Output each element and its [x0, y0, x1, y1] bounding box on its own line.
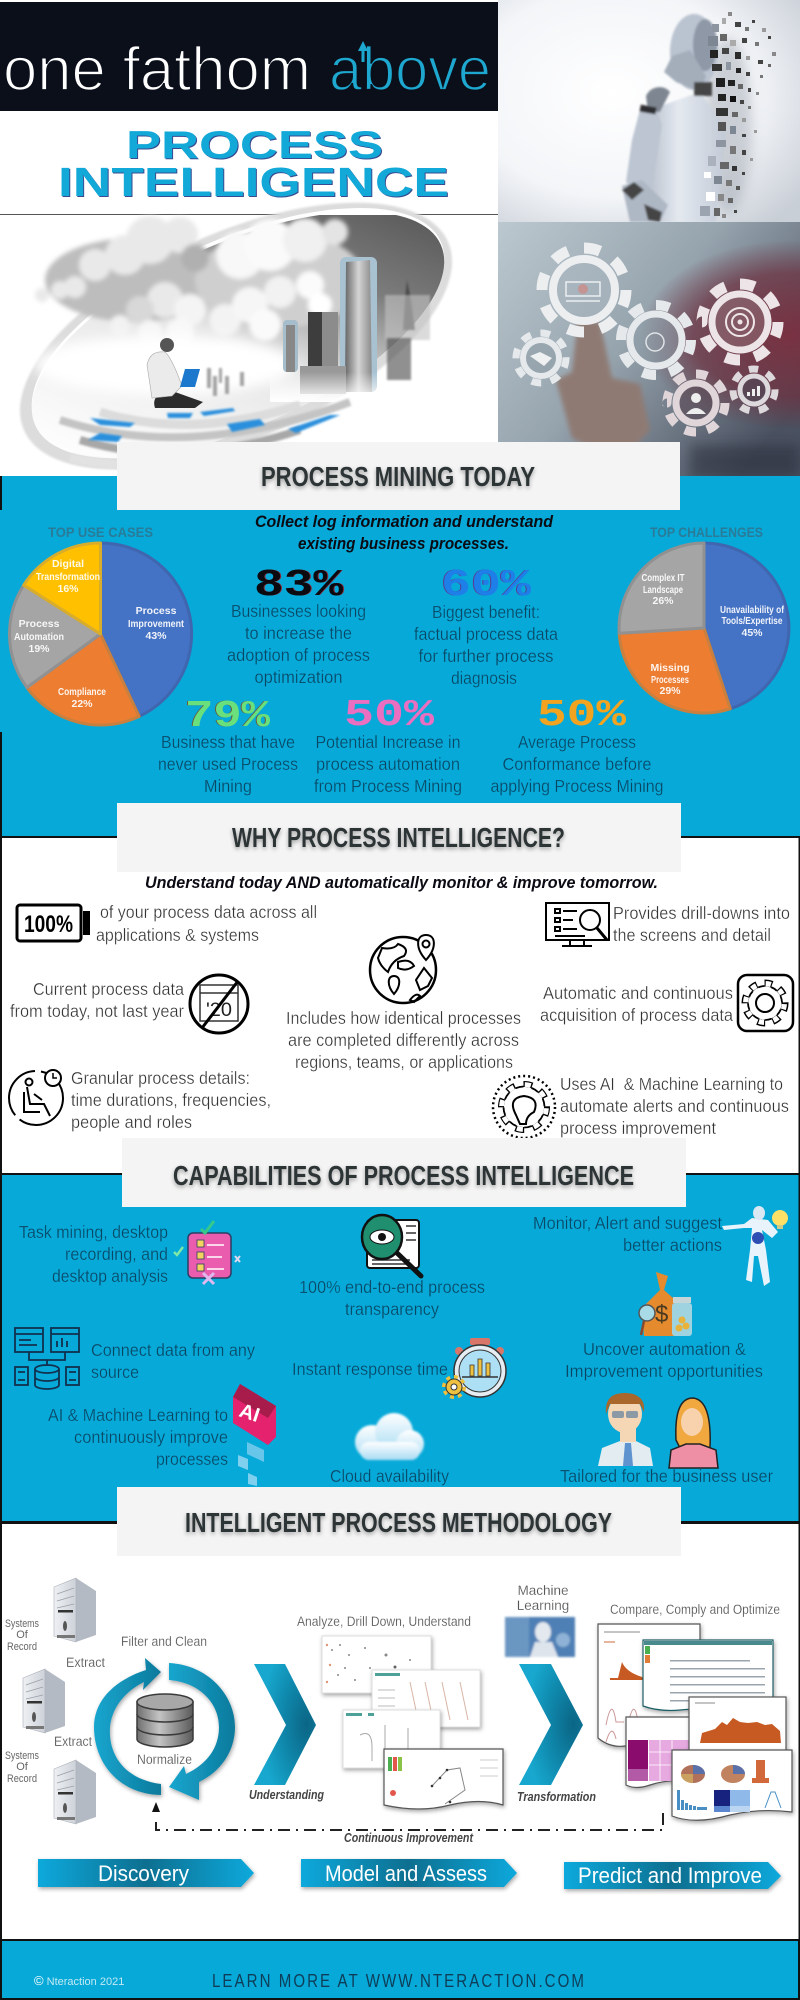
heading bar: process mining today: PROCESS MINING TODAY [261, 461, 535, 492]
tagline: Collect log information and understand [255, 513, 554, 531]
text: cloud availability: Cloud availability [330, 1466, 449, 1486]
chart: top challenges pie: 45% [741, 627, 763, 639]
screenshots: model views [297, 1614, 503, 1809]
sky and clouds [32, 215, 444, 458]
icon: battery 100%: 100% [24, 911, 73, 938]
heading bar: intelligent process methodology: INTELLIGENT PROCESS METHODOLOGY [185, 1507, 612, 1538]
icon: calendar 2020 crossed: '20 [206, 1000, 232, 1021]
concentric floor bands [60, 402, 350, 465]
chart: top use cases pie: Transformation [36, 571, 100, 583]
text: connect data: source [91, 1362, 139, 1382]
chevron: understanding [249, 1664, 324, 1802]
image: robot thinking [498, 0, 800, 222]
text: task mining: recording, and [65, 1244, 168, 1264]
text: automatic acquisition: Automatic and continuous [543, 983, 733, 1003]
text: ai and machine learning: automate alerts and continuous [560, 1096, 789, 1116]
stat: 50% automation: 50% [344, 694, 434, 737]
label: systems of record bottom: Of [16, 1761, 29, 1773]
icon: globe with pins [370, 935, 436, 1003]
text: drill-downs: Provides drill-downs into [613, 903, 790, 923]
image: robot on blue [505, 1617, 575, 1657]
screenshot: process flow [343, 1710, 440, 1768]
icon: magnifier over document [362, 1215, 421, 1276]
icon: monitor with magnifier [546, 903, 609, 946]
text: task mining: desktop analysis [52, 1266, 168, 1286]
chart: top use cases pie: Improvement [128, 618, 184, 630]
chart: top challenges pie: Complex IT [642, 572, 685, 584]
blue floor tiles [88, 408, 340, 442]
city skyline [283, 257, 430, 394]
label: systems of record bottom: Systems [5, 1750, 39, 1762]
text: instant response: Instant response time [292, 1359, 448, 1379]
stat: 79%: Business that have [161, 732, 295, 752]
screenshot: treemap [626, 1717, 700, 1788]
text: granular details: people and roles [71, 1112, 192, 1132]
chart: top use cases pie: Process [136, 605, 177, 617]
screenshot: scatter [322, 1636, 431, 1693]
stat: 50% conformance: Conformance before [502, 754, 652, 774]
screenshot: activity timeline [598, 1624, 700, 1746]
text: uncover automation: Uncover automation & [583, 1339, 746, 1359]
image: gears and pointing hand [498, 222, 800, 478]
chart: top challenges pie: 29% [659, 685, 681, 697]
label: systems of record top: Systems [5, 1618, 39, 1630]
text: monitor alert suggest: better actions [623, 1235, 722, 1255]
chart: top use cases pie: 22% [71, 698, 93, 710]
chart: top use cases pie: Digital [52, 558, 84, 570]
man [598, 1393, 653, 1466]
stat: 50% conformance: 50% [537, 694, 626, 737]
stat: 50% automation: Potential Increase in [316, 732, 460, 752]
icon: brain in gear with dotted ring [493, 1076, 555, 1138]
icon: stopwatch with gear [444, 1338, 506, 1397]
chevron: transformation: Transformation [517, 1790, 596, 1804]
small crowd of people [207, 368, 244, 396]
text: automatic acquisition: acquisition of process data [540, 1005, 733, 1025]
icon: server bottom [54, 1760, 96, 1824]
stat: 60%: factual process data [414, 624, 558, 644]
database cylinder [137, 1694, 193, 1747]
arrow: continuous improvement loop [152, 1802, 663, 1845]
gear: dollar [542, 248, 626, 332]
icon: seated person with clock [9, 1070, 63, 1125]
icon: calendar 2020 crossed [190, 975, 248, 1033]
text: end-to-end transparency: 100% end-to-end process [299, 1277, 485, 1297]
section: process mining today [0, 476, 800, 838]
stat: 83% [227, 564, 370, 687]
section: why process intelligence [0, 838, 800, 1176]
text: ai machine learning: continuously improve [74, 1427, 228, 1447]
icon: gear in rounded box [738, 975, 793, 1031]
screenshot: dashboard [384, 1749, 503, 1809]
stat: 83%: Businesses looking [231, 601, 366, 621]
text: tailored: Tailored for the business user [560, 1466, 773, 1486]
chart: top challenges pie [619, 524, 789, 713]
screenshot: pies and bars [672, 1750, 792, 1820]
stat: 79%: never used Process [158, 754, 298, 774]
stat: 50% automation: from Process Mining [314, 776, 462, 796]
label: analyze: Analyze, Drill Down, Understand [297, 1614, 471, 1629]
title: process intelligence: PROCESS [126, 124, 383, 167]
gear: person [667, 374, 725, 432]
text: identical processes: are completed differently across [288, 1030, 519, 1050]
label: machine learning: Machine [517, 1583, 569, 1598]
chart: top use cases pie [10, 524, 192, 725]
chart: top challenges pie: TOP CHALLENGES [650, 524, 763, 540]
stat: 83%: optimization [254, 667, 342, 687]
icon: connected data sources [15, 1328, 79, 1389]
text: ai machine learning: processes [156, 1449, 228, 1469]
text: end-to-end transparency: transparency [345, 1299, 439, 1319]
text: ai and machine learning: Uses AI & Machine Learning to [560, 1074, 783, 1094]
text: monitor alert suggest: Monitor, Alert and suggest [533, 1213, 722, 1233]
stat: 79%: Mining [204, 776, 252, 796]
icon: money bag with jar [639, 1272, 692, 1336]
stat: 50% conformance: Average Process [518, 732, 636, 752]
image: businessman with cloud and city ellipse [19, 202, 453, 470]
text: current process data: from today, not last year [10, 1001, 184, 1021]
cloud mass [35, 216, 365, 346]
section background [0, 476, 800, 838]
chart: top use cases pie: Automation [14, 631, 64, 643]
text: connect data: Connect data from any [91, 1340, 255, 1360]
copyright: © Nteraction 2021 [34, 1973, 124, 1988]
section: intelligent process methodology [0, 1524, 800, 1941]
chart: top challenges pie: Landscape [643, 584, 683, 596]
icon: server middle [23, 1669, 65, 1733]
stat: 60%: for further process [418, 646, 554, 666]
chevron: transformation [517, 1664, 596, 1804]
text: granular details: time durations, frequencies, [71, 1090, 271, 1110]
stat: 50% conformance: applying Process Mining [490, 776, 664, 796]
text: identical processes: regions, teams, or applications [295, 1052, 513, 1072]
label: filter and clean: Filter and Clean [121, 1634, 207, 1649]
businessman with laptop [147, 338, 203, 408]
text: identical processes: Includes how identical processes [286, 1008, 521, 1028]
text: current process data: Current process data [33, 979, 184, 999]
text: ai machine learning: AI & Machine Learning to [48, 1405, 228, 1425]
text: drill-downs: the screens and detail [613, 925, 771, 945]
text: granular details: Granular process details: [71, 1068, 250, 1088]
stat: 50% conformance [490, 694, 664, 796]
icon: cloud [355, 1413, 424, 1460]
stat: 83%: 83% [254, 564, 343, 607]
heading bar: why process intelligence [117, 803, 681, 872]
logo text one fathom: one fathom [3, 35, 311, 103]
stat: 60%: diagnosis [451, 668, 517, 688]
heading bar: capabilities [122, 1138, 686, 1207]
banner: discovery [38, 1859, 254, 1887]
chart: top use cases pie: 43% [145, 630, 167, 642]
stat: 60% [414, 564, 558, 688]
label: systems of record top: Of [16, 1629, 29, 1641]
icon: business users [598, 1393, 718, 1468]
chart: top challenges pie: Processes [651, 674, 689, 686]
icon: ai chip [233, 1384, 276, 1486]
chart: top challenges pie: Missing [650, 662, 690, 674]
chart: top challenges pie: 26% [652, 595, 674, 607]
chart: top use cases pie: TOP USE CASES [48, 524, 153, 540]
gear: chart [733, 369, 775, 411]
icon: money bag with jar: $ [655, 1301, 668, 1328]
text: process data: applications & systems [96, 925, 259, 945]
label: extract top: Extract [66, 1655, 105, 1670]
label: systems of record top: Record [7, 1641, 37, 1653]
gear: handshake [516, 333, 566, 383]
footer [0, 1939, 800, 2000]
screenshot: table with traces [372, 1670, 480, 1727]
text: task mining: Task mining, desktop [19, 1222, 168, 1242]
icon: battery 100% [17, 905, 90, 941]
chart: top use cases pie: 19% [28, 643, 50, 655]
label: machine learning: Learning [517, 1598, 569, 1613]
icon: server top [54, 1578, 96, 1642]
logo text above: above [329, 35, 491, 103]
tagline [255, 513, 554, 553]
swoosh ring [0, 148, 490, 524]
text: uncover automation: Improvement opportunities [565, 1361, 763, 1381]
chart: top challenges pie: Tools/Expertise [722, 615, 783, 627]
woman [669, 1398, 718, 1468]
label: compare: Compare, Comply and Optimize [610, 1602, 780, 1617]
chevron: understanding: Understanding [249, 1788, 324, 1802]
label: systems of record bottom: Record [7, 1773, 37, 1785]
heading bar: capabilities: CAPABILITIES OF PROCESS INTELLIGENCE [173, 1160, 634, 1191]
label: extract bottom: Extract [54, 1734, 92, 1749]
chart: top use cases pie: Process [19, 618, 60, 630]
stat: 79% [158, 695, 298, 796]
label: machine learning [505, 1583, 575, 1657]
chart: top use cases pie: Compliance [58, 686, 106, 698]
stat: 83%: adoption of process [227, 645, 370, 665]
banner: discovery: Discovery [98, 1861, 189, 1886]
text: ai and machine learning: process improvement [560, 1118, 716, 1138]
stat: 60%: Biggest benefit: [432, 602, 540, 622]
chart: top use cases pie: 16% [57, 583, 79, 595]
learn more text: LEARN MORE AT WWW.NTERACTION.COM [212, 1970, 586, 1991]
logo arrow [358, 41, 368, 62]
stat: 50% automation [314, 694, 462, 796]
screenshot: area chart [689, 1697, 786, 1752]
gear: stopwatch [621, 305, 691, 375]
banner: model and assess: Model and Assess [325, 1861, 487, 1886]
header: one fathom above logo [0, 2, 498, 111]
heading bar: intelligent process methodology [117, 1487, 681, 1556]
stat: 60%: 60% [441, 564, 531, 607]
chart: top challenges pie: Unavailability of [720, 604, 784, 616]
icon: ai chip: AI [236, 1400, 262, 1427]
label: normalize: Normalize [137, 1752, 192, 1767]
tagline: Understand today AND automatically monitor & improve tomorrow. [145, 874, 658, 892]
robot dispersing particles [700, 12, 776, 218]
text: process data: of your process data across all [100, 902, 317, 922]
stat: 83%: to increase the [245, 623, 352, 643]
title: process intelligence [58, 124, 449, 205]
stat: 79%: 79% [185, 695, 270, 738]
icon: robot holding light bulb [722, 1206, 788, 1286]
icon: checklist [174, 1221, 240, 1284]
banner: predict and improve: Predict and Improve [578, 1863, 762, 1888]
screenshots: predict views [598, 1602, 792, 1820]
heading bar: why process intelligence: WHY PROCESS INTELLIGENCE? [232, 822, 565, 853]
title: process intelligence: INTELLIGENCE [58, 159, 449, 205]
pointing hand [556, 318, 650, 462]
stat: 50% automation: process automation [316, 754, 460, 774]
section: capabilities of process intelligence [0, 1175, 800, 1524]
heading bar: process mining today [117, 442, 680, 510]
gear: target [702, 284, 778, 360]
icon: circular arrows around database [94, 1658, 235, 1800]
screenshot: data table [643, 1640, 773, 1710]
tagline: existing business processes. [298, 535, 509, 553]
arrow: continuous improvement loop: Continuous Improvement [344, 1831, 474, 1845]
